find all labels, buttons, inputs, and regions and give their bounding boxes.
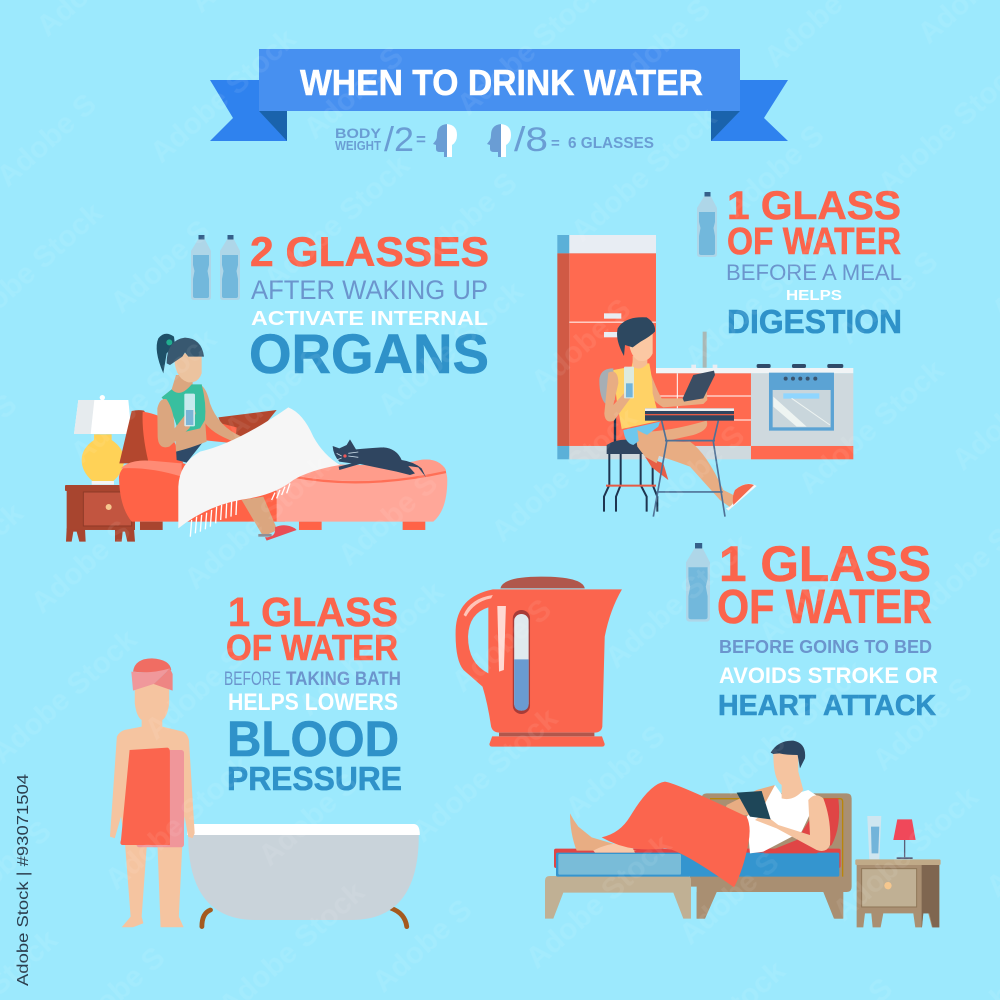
mattress	[554, 849, 841, 877]
text block: before going to bed: HEART ATTACK	[718, 690, 936, 722]
text block: after waking up	[249, 228, 489, 385]
text block: before taking bath: BEFORE	[224, 669, 281, 690]
text block: before taking bath: PRESSURE	[227, 760, 402, 797]
bathtub	[187, 824, 420, 927]
scene: man in bed	[545, 741, 941, 927]
text block: before a meal: 1 GLASS	[727, 184, 901, 228]
formula: body weight: BODY	[335, 125, 382, 141]
text block: before going to bed: 1 GLASS	[719, 536, 931, 592]
red blanket	[602, 782, 750, 887]
text block: before going to bed: BEFORE GOING TO BED	[719, 637, 932, 657]
tablet	[683, 371, 715, 402]
man	[570, 741, 839, 853]
text block: before a meal: HELPS	[786, 287, 842, 304]
text block: before taking bath: TAKING BATH	[286, 669, 401, 690]
far leg	[645, 457, 668, 480]
icon: large bottle	[686, 543, 710, 622]
text block: before a meal	[726, 184, 902, 340]
cat	[333, 439, 426, 477]
woman	[604, 317, 757, 511]
text block: after waking up: ORGANS	[249, 322, 489, 385]
stool	[599, 368, 657, 512]
text block: before a meal: DIGESTION	[727, 303, 902, 340]
blanket	[178, 407, 340, 537]
icon: one bottle	[697, 192, 717, 257]
formula: body weight: WEIGHT	[335, 138, 381, 153]
sofa	[119, 410, 447, 530]
text block: before taking bath: BLOOD	[227, 711, 399, 767]
icon: kettle	[456, 577, 622, 747]
formula: body weight: =	[551, 135, 560, 152]
glass	[867, 816, 881, 859]
text block: before a meal: OF WATER	[727, 221, 901, 263]
formula: body weight	[335, 121, 654, 159]
text block: before going to bed: OF WATER	[717, 581, 932, 634]
text block: before going to bed: AVOIDS STROKE OR	[719, 663, 938, 688]
bed frame	[545, 793, 852, 919]
text block: after waking up: ACTIVATE INTERNAL	[251, 308, 488, 330]
tablet	[737, 791, 771, 819]
scene: woman on sofa	[65, 334, 447, 542]
nightstand	[65, 485, 136, 542]
stock credit: Adobe Stock | #93071504	[15, 774, 32, 986]
table lamp	[893, 819, 916, 859]
table	[645, 408, 734, 517]
fridge	[557, 235, 656, 459]
text block: before taking bath: 1 GLASS	[228, 589, 398, 635]
text block: before going to bed	[717, 536, 938, 722]
text block: before taking bath: HELPS LOWERS	[228, 689, 398, 716]
text block: before taking bath	[224, 589, 402, 797]
woman	[157, 334, 242, 463]
title: WHEN TO DRINK WATER	[300, 62, 703, 103]
text block: before a meal: BEFORE A MEAL	[726, 260, 902, 285]
legs and slippers	[242, 497, 297, 541]
scene: kitchen	[557, 235, 853, 517]
nightstand	[855, 859, 941, 927]
formula: body weight: =	[416, 130, 426, 149]
formula: body weight: 6 GLASSES	[568, 135, 654, 152]
title ribbon	[210, 49, 788, 141]
scene: woman and bathtub	[110, 658, 420, 927]
text block: after waking up: 2 GLASSES	[250, 228, 489, 275]
text block: before taking bath: OF WATER	[226, 627, 398, 668]
icon: two bottles	[191, 235, 240, 300]
counter and oven	[656, 332, 853, 459]
formula: body weight: /2	[384, 121, 414, 159]
formula: body weight: /8	[514, 121, 548, 159]
woman in towel	[110, 658, 195, 927]
text block: after waking up: AFTER WAKING UP	[251, 275, 488, 305]
lamp	[74, 395, 132, 485]
